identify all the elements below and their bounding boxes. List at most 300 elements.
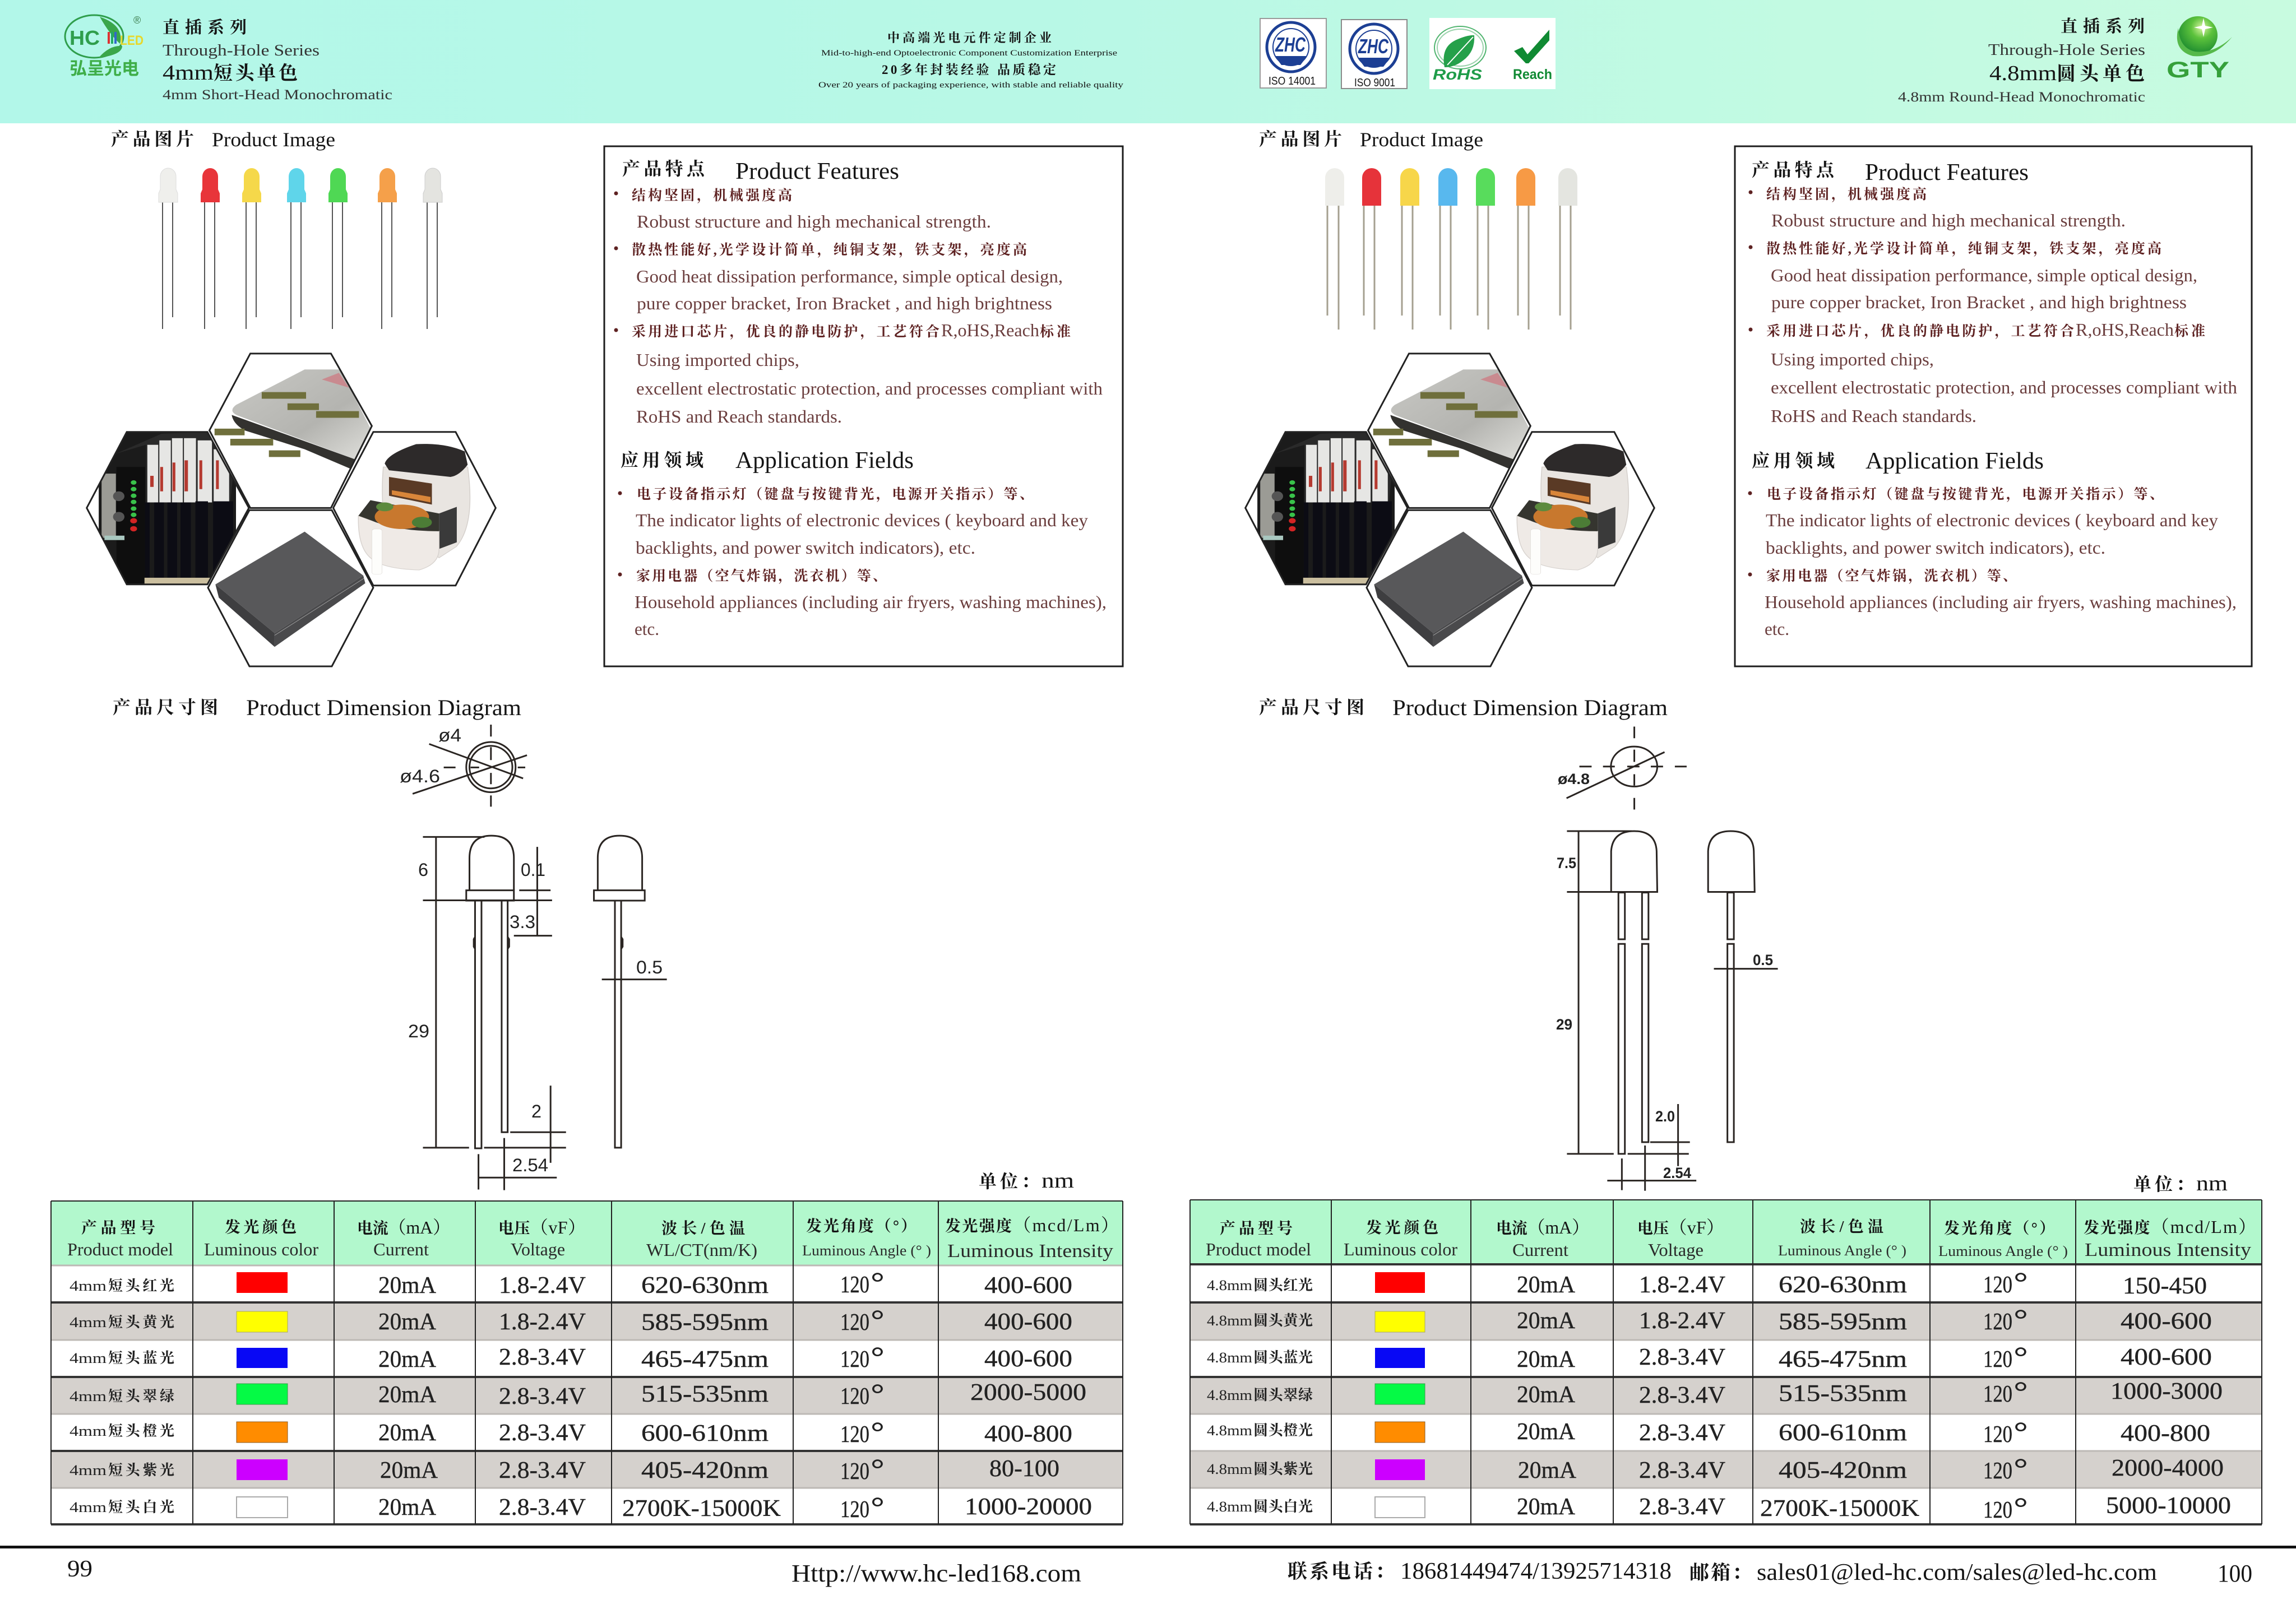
photo: black box: [215, 532, 365, 647]
hexagon outlines: [87, 354, 496, 666]
unit note (right): nm: [2196, 1172, 2228, 1195]
row: yellow: 400-600: [2121, 1309, 2212, 1334]
header centre slogan: Over 20 years of packaging experience, with stable and reliable quality: [818, 81, 1124, 90]
row: blue: °: [871, 1342, 885, 1374]
photo: router: [215, 369, 371, 469]
dimension drawing (right): 29: [1556, 1016, 1572, 1033]
heading: product image (left): [111, 128, 335, 151]
table header row: Luminous color: [1344, 1239, 1457, 1259]
row: emerald: 短头翠绿: [108, 1388, 174, 1404]
row: blue: °: [2013, 1342, 2028, 1374]
feature list: excellent electrostatic protection, and processes compliant with: [636, 378, 1103, 398]
feature list: RoHS and Reach standards.: [1771, 406, 1976, 426]
row: blue: 2.8-3.4V: [1639, 1344, 1725, 1370]
feature list: 结构坚固，机械强度高: [632, 187, 792, 204]
application list: backlights, and power switch indicators), etc.: [636, 537, 975, 558]
application photos hexagon cluster (left): [85, 354, 496, 666]
heading: application fields: Application Fields: [735, 448, 914, 474]
table header row: 波长/色温: [1800, 1218, 1883, 1236]
photo: rack panel: [1257, 433, 1395, 584]
row: blue: 120: [840, 1347, 869, 1372]
row: blue: 400-600: [2121, 1344, 2212, 1370]
page number 100: 100: [2218, 1560, 2252, 1587]
row: emerald: [70, 1379, 1086, 1411]
row: orange: 2.8-3.4V: [499, 1420, 586, 1446]
row: yellow: 20mA: [1517, 1308, 1576, 1334]
row: yellow: 1.8-2.4V: [499, 1309, 586, 1335]
dimension drawing (left): 6: [418, 860, 428, 880]
table header row: 电压（vF）: [498, 1217, 586, 1237]
row: purple: 120: [1983, 1458, 2012, 1484]
row: red: 620-630nm: [641, 1273, 769, 1299]
row: red: 400-600: [984, 1273, 1072, 1299]
row: orange: 圆头橙光: [1253, 1422, 1313, 1439]
application list: 电子设备指示灯（键盘与按键背光，电源开关指示）等、: [1767, 486, 2164, 503]
header left text: 直插系列: [163, 18, 247, 37]
row: white: [70, 1492, 1092, 1524]
table: 4.8mm specs: [1190, 1200, 2262, 1524]
row: blue: 圆头蓝光: [1253, 1349, 1313, 1366]
dimension drawing (left): ø4.6: [400, 766, 440, 786]
row: orange: 120: [840, 1422, 869, 1448]
application list: 家用电器（空气炸锅，洗衣机）等、: [1766, 568, 2017, 585]
feature list: 散热性能好,光学设计简单，纯铜支架，铁支架，亮度高: [1766, 240, 2161, 257]
row: emerald: 20mA: [1517, 1382, 1576, 1408]
heading: application fields: Application Fields: [1866, 448, 2044, 474]
feature list: R,oHS,Reach: [2076, 319, 2174, 340]
email contact: sales01@led-hc.com/sales@led-hc.com: [1757, 1560, 2157, 1585]
row: emerald: 1000-3000: [2110, 1379, 2223, 1404]
row: yellow: 120: [840, 1310, 869, 1336]
unit note (right): 单位：: [2133, 1174, 2194, 1194]
badge: RoHS and Reach: RoHS: [1433, 66, 1482, 83]
header left text: [163, 18, 392, 103]
row: blue: 4mm: [70, 1350, 107, 1366]
unit note (left): [979, 1169, 1074, 1193]
row: orange: 600-610nm: [641, 1421, 769, 1446]
logo: HC LED: HC: [70, 26, 100, 49]
header left text: 短头单色: [214, 63, 298, 84]
heading: product dimension diagram (right): [1259, 695, 1668, 720]
row: emerald: [1207, 1376, 2223, 1408]
row: white: °: [871, 1492, 885, 1524]
row: orange: 短头橙光: [108, 1422, 174, 1439]
row: red: 短头红光: [108, 1277, 174, 1294]
heading: product features: 产品特点: [622, 159, 706, 179]
row: yellow: 4mm: [70, 1314, 107, 1330]
row: purple: 2000-4000: [2112, 1455, 2224, 1481]
header right text: 圆头单色: [2057, 63, 2145, 85]
row: orange: [1207, 1417, 2210, 1449]
unit note (left): 单位：: [979, 1171, 1039, 1191]
row: orange: 20mA: [378, 1420, 437, 1446]
row: white: 120: [840, 1497, 869, 1523]
table header row: Current: [373, 1239, 429, 1259]
row: purple: 2.8-3.4V: [1639, 1458, 1725, 1483]
row: white: [1207, 1492, 2231, 1524]
row: red: 620-630nm: [1779, 1272, 1907, 1298]
row: red: [70, 1267, 1072, 1299]
row: red: °: [871, 1267, 885, 1299]
dimension drawing (right): 2.0: [1655, 1108, 1675, 1125]
row: blue: [1207, 1342, 2212, 1374]
row: blue: 465-475nm: [1779, 1347, 1907, 1372]
table header row: Product model: [67, 1239, 173, 1259]
row: purple: 20mA: [380, 1458, 438, 1483]
heading: product dimension diagram (left): Product Dimension Diagram: [246, 695, 521, 720]
row: white: 5000-10000: [2106, 1493, 2231, 1519]
header left text: Through-Hole Series: [163, 41, 320, 59]
header band: [0, 0, 2296, 123]
row: purple: 2.8-3.4V: [499, 1458, 586, 1483]
phone contact: [1288, 1559, 1672, 1584]
table header row: 发光颜色: [1366, 1219, 1438, 1237]
row: emerald: 120: [840, 1384, 869, 1409]
row: red: 1.8-2.4V: [499, 1273, 586, 1299]
row: white: 120: [1983, 1497, 2012, 1523]
phone contact: 联系电话：: [1288, 1561, 1395, 1583]
row: yellow: 120: [1983, 1309, 2012, 1335]
row: yellow: 400-600: [984, 1309, 1072, 1335]
dimension drawing (left): 0.1: [521, 860, 545, 880]
row: white: 4mm: [70, 1499, 107, 1515]
table header row: [1190, 1200, 2262, 1264]
table header row: Voltage: [511, 1239, 565, 1259]
header right text: 4.8mm: [1989, 62, 2057, 85]
application list: 家用电器（空气炸锅，洗衣机）等、: [636, 568, 887, 585]
row: purple: 405-420nm: [1779, 1458, 1907, 1483]
heading: application fields: 应用领域: [1752, 451, 1835, 471]
feature list: pure copper bracket, Iron Bracket , and high brightness: [1771, 292, 2187, 312]
badge: RoHS and Reach: [1429, 18, 1556, 89]
row: orange: 4.8mm: [1207, 1422, 1252, 1439]
row: white: 20mA: [378, 1495, 437, 1520]
heading: product image (left): Product Image: [212, 128, 335, 151]
row: red: 圆头红光: [1253, 1277, 1313, 1293]
row: blue: 短头蓝光: [108, 1350, 174, 1366]
application list: etc.: [1765, 619, 1789, 639]
row: emerald: 圆头翠绿: [1253, 1386, 1313, 1403]
row: purple: °: [871, 1454, 885, 1486]
table header row: Luminous Angle (° ): [802, 1242, 931, 1259]
row: purple: 4.8mm: [1207, 1461, 1252, 1477]
feature list: pure copper bracket, Iron Bracket , and high brightness: [637, 293, 1052, 313]
heading: product image (right): Product Image: [1360, 128, 1483, 151]
row: white: 1000-20000: [965, 1494, 1092, 1520]
LED photo row (left): [159, 168, 442, 329]
table: 4mm specs: [51, 1201, 1123, 1524]
row: yellow: 圆头黄光: [1253, 1312, 1313, 1329]
dimension drawing (right): 2.54: [1663, 1165, 1691, 1181]
row: blue: 20mA: [1517, 1347, 1576, 1372]
header left text: 4mm: [163, 61, 214, 85]
table header row: 电流（mA）: [1496, 1217, 1590, 1237]
heading: application fields: [621, 448, 914, 474]
panel: features and applications (left): [604, 146, 1123, 666]
row: yellow: [70, 1305, 1072, 1337]
row: emerald: 4mm: [70, 1388, 107, 1404]
row: blue: 120: [1983, 1347, 2012, 1372]
heading: product features: 产品特点: [1752, 160, 1835, 180]
logo: HC LED: [65, 15, 144, 78]
row: purple: 圆头紫光: [1253, 1460, 1313, 1477]
heading: product features: [1752, 160, 2029, 186]
row: yellow: 短头黄光: [108, 1314, 174, 1330]
heading: product image (right): [1259, 128, 1483, 151]
row: red: 20mA: [378, 1273, 437, 1299]
feature list: Good heat dissipation performance, simple optical design,: [636, 266, 1063, 286]
row: yellow: 4.8mm: [1207, 1313, 1252, 1329]
table header row: WL/CT(nm/K): [646, 1240, 757, 1260]
row: red: 150-450: [2123, 1273, 2207, 1299]
row: purple: 20mA: [1518, 1458, 1577, 1483]
row: white: 20mA: [1517, 1494, 1576, 1520]
dimension drawing (left): 3.3: [510, 912, 535, 932]
badge: ISO 14001: [1260, 18, 1326, 88]
row: orange: 400-800: [984, 1421, 1072, 1447]
row: emerald: 515-535nm: [1779, 1381, 1907, 1407]
application photos hexagon cluster (right): [1243, 354, 1654, 666]
header centre slogan: 中高端光电元件定制企业: [887, 31, 1052, 45]
table header row: Luminous Intensity: [947, 1241, 1113, 1262]
dimension drawing (right): 7.5: [1557, 855, 1576, 871]
table header row: Product model: [1206, 1239, 1311, 1259]
dimension drawing (left): 29: [408, 1021, 429, 1041]
table header row: 波长/色温: [661, 1219, 745, 1237]
heading: application fields: 应用领域: [621, 450, 703, 470]
row: purple: 短头紫光: [108, 1462, 174, 1478]
feature list: R,oHS,Reach: [941, 320, 1039, 340]
row: white: 短头白光: [108, 1499, 174, 1515]
row: orange: [70, 1417, 1072, 1449]
application list: Household appliances (including air fryers, washing machines),: [635, 592, 1107, 612]
photo: air fryer: [358, 444, 470, 574]
heading: product image (right): 产品图片: [1259, 129, 1342, 149]
feature list: [614, 187, 1103, 426]
dimension drawing (right): ø4.8: [1558, 771, 1590, 787]
logo: HC LED: 弘呈光电: [70, 59, 139, 78]
heading: product dimension diagram (right): 产品尺寸图: [1259, 697, 1364, 717]
row: yellow: 585-595nm: [1779, 1309, 1907, 1335]
header centre slogan: Mid-to-high-end Optoelectronic Component Customization Enterprise: [821, 49, 1117, 58]
row: purple: 4mm: [70, 1462, 107, 1478]
panel: features and applications (right): [1735, 146, 2252, 666]
row: emerald: °: [2013, 1376, 2028, 1408]
application list: The indicator lights of electronic devices ( keyboard and key: [1766, 510, 2218, 530]
header left text: 4mm Short-Head Monochromatic: [163, 87, 392, 103]
header centre slogan: 20多年封装经验 品质稳定: [882, 62, 1056, 77]
feature list: 标准: [2174, 323, 2205, 339]
row: white: 2.8-3.4V: [1639, 1494, 1725, 1520]
heading: product features: [622, 159, 899, 184]
header right text: Through-Hole Series: [1988, 41, 2145, 59]
header right text: [1898, 17, 2145, 105]
unit note (left): nm: [1041, 1169, 1074, 1193]
row: emerald: 120: [1983, 1381, 2012, 1407]
row: blue: 465-475nm: [641, 1347, 769, 1372]
table header row: 产品型号: [1220, 1219, 1293, 1237]
row: emerald: 2.8-3.4V: [1639, 1383, 1725, 1408]
dimension drawing (right): [1556, 726, 1778, 1191]
table header row: Current: [1512, 1240, 1568, 1260]
row: purple: °: [2013, 1453, 2028, 1485]
row: emerald: 515-535nm: [641, 1381, 769, 1407]
table header row: 电流（mA）: [357, 1217, 451, 1237]
feature list: Good heat dissipation performance, simple optical design,: [1771, 265, 2197, 285]
table header row: 电压（vF）: [1637, 1217, 1724, 1237]
page number 99: 99: [67, 1556, 92, 1582]
application list: [1748, 486, 2237, 639]
row: blue: 400-600: [984, 1346, 1072, 1372]
row: white: 2700K-15000K: [622, 1496, 781, 1522]
row: yellow: 1.8-2.4V: [1639, 1308, 1725, 1334]
logo: HC LED: ®: [133, 15, 141, 26]
row: blue: 20mA: [378, 1347, 437, 1372]
application list: etc.: [635, 619, 659, 639]
row: yellow: 20mA: [378, 1309, 437, 1335]
row: emerald: 20mA: [378, 1382, 437, 1408]
table header row: 发光角度（°）: [1944, 1219, 2055, 1237]
logo: HC LED: LED: [120, 33, 144, 48]
email contact: 邮箱：: [1689, 1562, 1752, 1584]
LED photo row (right): [1325, 168, 1577, 330]
row: red: 4.8mm: [1207, 1277, 1252, 1293]
phone contact: 18681449474/13925714318: [1400, 1559, 1672, 1584]
row: orange: 2.8-3.4V: [1639, 1420, 1725, 1446]
feature list: 采用进口芯片，优良的静电防护，工艺符合: [632, 324, 939, 340]
application list: 电子设备指示灯（键盘与按键背光，电源开关指示）等、: [637, 486, 1034, 503]
photo: router: [1373, 369, 1530, 469]
row: yellow: [1207, 1304, 2212, 1336]
feature list: 标准: [1040, 324, 1071, 340]
application list: [618, 486, 1107, 639]
row: white: 圆头白光: [1253, 1498, 1313, 1515]
feature list: Using imported chips,: [1771, 349, 1934, 369]
header right text: 直插系列: [2061, 17, 2145, 36]
row: white: °: [2013, 1492, 2028, 1524]
table header row: Luminous Angle (° ): [1938, 1243, 2068, 1259]
heading: product dimension diagram (left): [113, 695, 521, 720]
application list: The indicator lights of electronic devices ( keyboard and key: [636, 510, 1088, 530]
feature list: 采用进口芯片，优良的静电防护，工艺符合: [1766, 323, 2074, 340]
row: red: 20mA: [1517, 1272, 1576, 1298]
photo: air fryer: [1517, 444, 1628, 574]
table header row: Luminous Angle (° ): [1778, 1242, 1906, 1259]
row: emerald: °: [871, 1379, 885, 1411]
feature list: Robust structure and high mechanical strength.: [1771, 210, 2126, 230]
badge: ISO 9001: [1341, 20, 1407, 89]
table header row: 产品型号: [81, 1219, 155, 1237]
badge: ISO 14001: ISO 14001: [1269, 75, 1316, 87]
row: orange: 400-800: [2121, 1421, 2210, 1446]
row: white: 4.8mm: [1207, 1499, 1252, 1515]
heading: product image (left): 产品图片: [111, 129, 194, 149]
table header row: 发光强度（mcd/Lm）: [945, 1215, 1119, 1235]
row: orange: 4mm: [70, 1423, 107, 1439]
header right text: 4.8mm Round-Head Monochromatic: [1898, 90, 2145, 105]
heading: application fields: [1752, 448, 2044, 474]
feature list: excellent electrostatic protection, and processes compliant with: [1771, 377, 2237, 397]
row: purple: [1207, 1453, 2224, 1485]
table header row: Luminous color: [204, 1239, 318, 1259]
dimension drawing (left): 0.5: [636, 957, 663, 977]
feature list: [1749, 186, 2237, 426]
row shading and grid: [51, 1201, 1123, 1524]
badge: RoHS and Reach: Reach: [1513, 67, 1552, 82]
unit note (right): [2133, 1172, 2228, 1195]
row: purple: [70, 1454, 1059, 1486]
row: red: 120: [1983, 1272, 2012, 1298]
row: yellow: 585-595nm: [641, 1310, 769, 1336]
table header row: 发光角度（°）: [806, 1217, 916, 1235]
row: red: [1207, 1267, 2207, 1299]
table header row: 发光颜色: [225, 1218, 297, 1236]
row: yellow: °: [2013, 1304, 2028, 1336]
table header row: [51, 1201, 1123, 1265]
application list: Household appliances (including air fryers, washing machines),: [1765, 592, 2237, 612]
row: white: 2.8-3.4V: [499, 1495, 586, 1520]
badge: ISO 9001: ISO 9001: [1354, 77, 1395, 89]
row: orange: °: [2013, 1417, 2028, 1449]
heading: product dimension diagram (left): 产品尺寸图: [113, 697, 218, 717]
row: red: 4mm: [70, 1278, 107, 1294]
row shading and grid: [1190, 1200, 2262, 1524]
badge: ISO 14001: ZHC: [1275, 33, 1306, 56]
row: yellow: °: [871, 1305, 885, 1337]
hexagon outlines: [1246, 354, 1654, 666]
feature list: RoHS and Reach standards.: [636, 406, 842, 426]
dimension drawing (right): 0.5: [1753, 952, 1773, 968]
row: purple: 80-100: [989, 1456, 1059, 1482]
heading: product dimension diagram (right): Product Dimension Diagram: [1392, 695, 1668, 720]
row: orange: 20mA: [1517, 1419, 1576, 1445]
feature list: Using imported chips,: [636, 350, 799, 370]
row: emerald: 4.8mm: [1207, 1387, 1252, 1403]
row: blue: 2.8-3.4V: [499, 1344, 586, 1370]
table header row: Luminous Intensity: [2085, 1240, 2251, 1260]
heading: product features: Product Features: [735, 159, 899, 184]
application list: backlights, and power switch indicators), etc.: [1766, 537, 2105, 558]
dimension drawing (left): 2.54: [512, 1155, 548, 1175]
row: purple: 405-420nm: [641, 1458, 769, 1483]
row: red: °: [2013, 1267, 2028, 1299]
row: blue: [70, 1342, 1072, 1374]
dimension drawing (left): ø4: [438, 725, 461, 745]
row: emerald: 2000-5000: [970, 1380, 1086, 1406]
feature list: 散热性能好,光学设计简单，纯铜支架，铁支架，亮度高: [632, 242, 1027, 258]
logo: GTY: [2167, 16, 2232, 82]
heading: product features: Product Features: [1865, 160, 2029, 186]
footer: [0, 1546, 2296, 1587]
photo: rack panel: [99, 433, 236, 584]
row: orange: °: [871, 1417, 885, 1449]
header centre slogan: [818, 31, 1124, 90]
logo: GTY: GTY: [2167, 58, 2229, 82]
row: emerald: 2.8-3.4V: [499, 1384, 586, 1409]
table header row: Voltage: [1648, 1240, 1704, 1260]
photo: black box: [1374, 532, 1524, 647]
row: orange: 120: [1983, 1422, 2012, 1448]
row: red: 120: [840, 1272, 869, 1298]
row: white: 2700K-15000K: [1760, 1496, 1919, 1522]
row: blue: 4.8mm: [1207, 1350, 1252, 1366]
website: Http://www.hc-led168.com: [791, 1560, 1081, 1587]
row: red: 1.8-2.4V: [1639, 1272, 1725, 1298]
dimension drawing (left): [400, 725, 667, 1190]
row: purple: 120: [840, 1459, 869, 1485]
feature list: 结构坚固，机械强度高: [1766, 186, 1927, 203]
dimension drawing (left): 2: [531, 1101, 541, 1121]
